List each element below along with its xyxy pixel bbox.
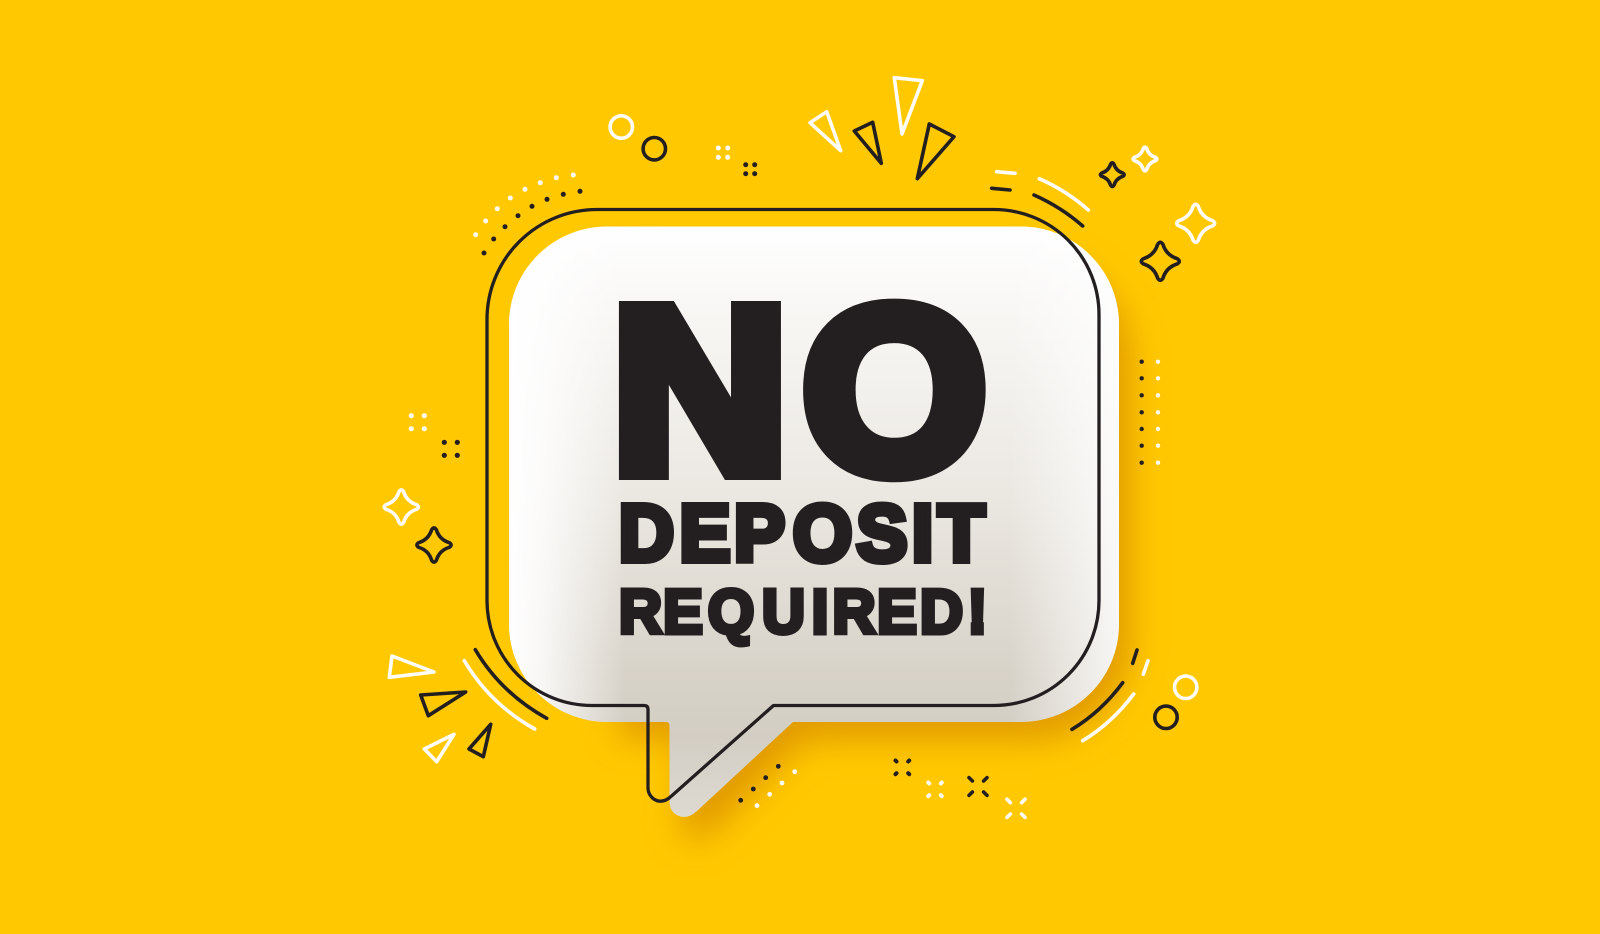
dark diagonal dots <box>738 764 781 803</box>
dark triangle 2 <box>469 724 491 757</box>
white cross ticks <box>1007 799 1025 817</box>
dark arc <box>1034 195 1083 226</box>
dark arc <box>475 650 547 718</box>
white dot square <box>716 146 730 160</box>
icon: dark large star <box>1141 242 1179 280</box>
dark dot column <box>1140 360 1144 465</box>
dark dash <box>992 188 1010 190</box>
speech bubble <box>487 210 1130 839</box>
white arc <box>464 661 535 729</box>
dark cross ticks <box>969 778 987 795</box>
icon: white small star <box>1133 147 1157 171</box>
dark triangle tall <box>917 124 954 179</box>
decorations: top right cluster <box>992 147 1215 280</box>
icon: white large star <box>1177 204 1215 242</box>
white triangle 1 <box>389 656 434 677</box>
icon: white circle <box>610 116 632 138</box>
white arc <box>1039 179 1088 210</box>
dark dot square left <box>442 440 460 458</box>
white dotted arc <box>473 172 576 237</box>
headline word: NO, letter O: O <box>802 259 986 521</box>
dark short dash <box>1133 650 1137 663</box>
dark short ticks <box>896 760 909 774</box>
white diagonal dots <box>755 769 797 808</box>
dark dot square <box>743 162 757 176</box>
icon: dark circle <box>1155 706 1177 728</box>
white triangle left <box>810 112 841 151</box>
decorations: top cluster <box>610 78 954 179</box>
icon: dark star left <box>417 528 451 562</box>
headline word: DEPOSIT: DEPOSIT <box>619 488 985 578</box>
headline word: REQUIRED!: REQUIRED! <box>619 577 987 646</box>
white triangle tall <box>894 78 922 134</box>
bubble shadow <box>620 260 1130 839</box>
icon: white circle <box>1174 676 1197 698</box>
dark arc <box>1072 683 1123 729</box>
decorations: left cluster <box>384 413 460 562</box>
white short dash <box>1143 661 1148 674</box>
bubble body <box>500 220 1130 830</box>
white dash <box>997 172 1015 173</box>
decorations: bottom left cluster <box>389 650 547 762</box>
decorations: bottom right cluster <box>1072 650 1197 741</box>
decorations: right dot columns <box>1140 360 1160 465</box>
icon: dark circle <box>643 138 666 160</box>
white triangle 2 <box>424 734 454 762</box>
white dot column <box>1156 360 1160 465</box>
dark triangle left <box>854 122 881 163</box>
decorations: dotted arcs top left <box>473 172 582 256</box>
white arc <box>1083 694 1134 741</box>
icon: white star left <box>384 490 418 524</box>
headline <box>612 259 987 646</box>
dark triangle 1 <box>421 692 466 716</box>
infographic canvas <box>382 76 1216 848</box>
bubble outline <box>487 210 1099 801</box>
dark dotted arc <box>482 189 582 256</box>
white dot square left <box>409 413 427 431</box>
white short ticks <box>928 782 942 796</box>
icon: dark small star <box>1100 163 1124 187</box>
headline word: NO, letter N: N <box>612 259 788 521</box>
decorations: bottom dots and ticks <box>738 760 1025 817</box>
